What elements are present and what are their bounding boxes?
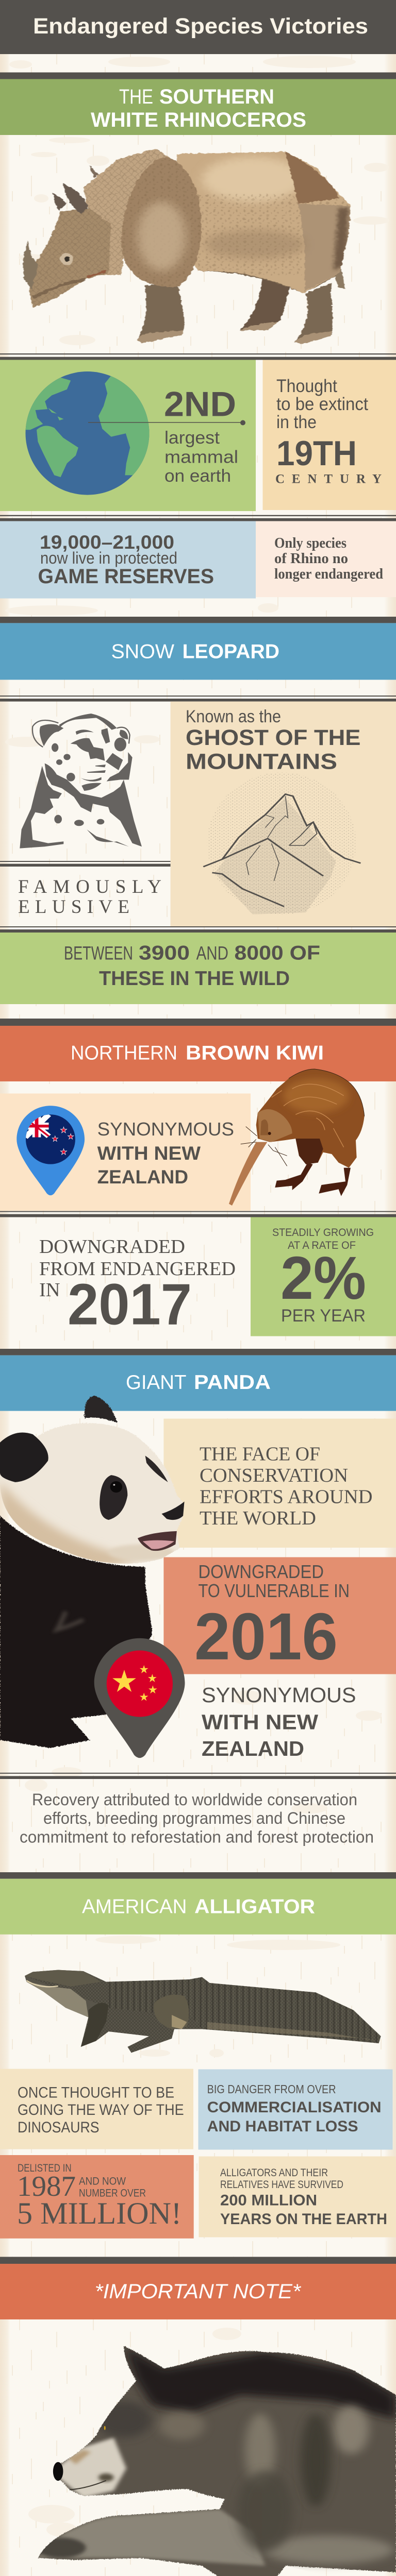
panel: synonymous with new zealand: [0, 1093, 251, 1211]
panel: leopard population: [0, 933, 396, 1004]
text: famously elusive: ELUSIVE: [18, 896, 129, 918]
panel: thought extinct: [263, 360, 396, 510]
panel: leopard population: AND: [196, 943, 228, 964]
panel: way of the dinosaurs: [0, 2069, 193, 2149]
panel: growth rate: STEADILY GROWING: [272, 1227, 374, 1239]
divider: rhino facts middle: [0, 515, 396, 521]
panel: delisted 1987: 1987: [17, 2171, 76, 2202]
panel: synonymous with new zealand: ZEALAND: [97, 1166, 188, 1188]
panel: ghost of the mountains: GHOST OF THE: [186, 725, 361, 750]
panel: synonymous with new zealand: SYNONYMOUS: [97, 1118, 234, 1140]
illustration: wolf: [36, 2346, 396, 2576]
heading: the southern white rhinoceros: WHITE RHINOCEROS: [91, 109, 306, 131]
panel: synonymous with new zealand: WITH NEW: [97, 1143, 201, 1164]
panel: thought extinct: CENTURY: [275, 472, 382, 486]
heading: american alligator: [82, 1896, 315, 1918]
pointer line: [88, 420, 245, 426]
text: famously elusive: FAMOUSLY: [18, 876, 161, 897]
panel: downgraded to vulnerable: TO VULNERABLE IN: [198, 1580, 350, 1601]
text: downgraded from endangered in 2017: FROM ENDANGERED: [39, 1258, 236, 1280]
text: downgraded from endangered in 2017: DOWNGRADED: [39, 1236, 185, 1258]
heading: giant panda: [126, 1371, 271, 1394]
panel: 200 million years: 200 MILLION: [220, 2192, 317, 2209]
text: synonymous with new zealand (panda): WITH NEW: [202, 1710, 318, 1734]
divider: leopard top: [0, 696, 396, 702]
section band: alligator: [0, 1872, 396, 1935]
panel: way of the dinosaurs: ONCE THOUGHT TO BE: [18, 2084, 174, 2102]
text: synonymous with new zealand (panda): SYNONYMOUS: [202, 1683, 356, 1707]
heading: snow leopard: LEOPARD: [183, 640, 279, 663]
panel: game reserves: now live in protected: [40, 549, 177, 567]
text: recovery attributed: Recovery attributed to worldwide conservation: [32, 1790, 357, 1809]
text: recovery attributed: commitment to reforestation and forest protection: [20, 1828, 374, 1846]
heading: northern brown kiwi: BROWN KIWI: [186, 1042, 324, 1064]
divider: kiwi middle: [0, 1211, 396, 1217]
panel: leopard population: 8000 OF: [234, 942, 320, 964]
heading: important note: *IMPORTANT NOTE*: [95, 2280, 301, 2303]
panel: big danger: COMMERCIALISATION: [207, 2099, 382, 2116]
divider: leopard bottom: [0, 926, 396, 933]
panel: way of the dinosaurs: DINOSAURS: [18, 2119, 99, 2136]
panel: ghost of the mountains: Known as the: [186, 707, 281, 726]
divider: rhino facts top: [0, 353, 396, 360]
text: downgraded from endangered in 2017: IN: [39, 1279, 60, 1301]
panel: big danger: AND HABITAT LOSS: [207, 2118, 358, 2135]
title: Endangered Species Victories: [33, 14, 368, 39]
heading: northern brown kiwi: [71, 1042, 324, 1064]
panel: game reserves: GAME RESERVES: [38, 565, 214, 588]
section band: rhinoceros: [0, 72, 396, 135]
panel: leopard population: THESE IN THE WILD: [99, 968, 290, 990]
panel: thought extinct: Thought: [276, 376, 337, 396]
panel: thought extinct: in the: [276, 412, 317, 432]
header bar: [0, 0, 396, 54]
heading: snow leopard: [111, 640, 279, 663]
panel: game reserves: 19,000–21,000: [40, 532, 174, 553]
section band: panda: [0, 1349, 396, 1411]
panel: ghost of the mountains: MOUNTAINS: [186, 749, 337, 774]
panel: downgraded to vulnerable: 2016: [194, 1600, 338, 1674]
panel: game reserves: [0, 521, 256, 599]
stat: 2nd largest mammal on earth: largest: [164, 428, 220, 448]
panel: leopard population: BETWEEN: [64, 943, 133, 964]
panel: 200 million years: RELATIVES HAVE SURVIVED: [220, 2179, 343, 2191]
section band: snow leopard: [0, 617, 396, 680]
heading: giant panda: GIANT: [126, 1371, 187, 1394]
divider: famously elusive: [0, 861, 171, 867]
illustration: kiwi: [229, 1069, 365, 1206]
panel: second largest mammal: [0, 360, 256, 511]
stat: 2nd largest mammal on earth: mammal: [164, 447, 238, 467]
text: downgraded from endangered in 2017: 2017: [68, 1272, 192, 1336]
panel: big danger: [198, 2069, 393, 2149]
panel: face of conservation: [163, 1419, 396, 1548]
icon: china pin: [94, 1638, 185, 1758]
text: synonymous with new zealand (panda): ZEALAND: [202, 1737, 304, 1760]
panel: delisted 1987: 5 MILLION!: [17, 2196, 182, 2230]
panel: delisted 1987: [0, 2155, 194, 2239]
text: famously elusive: [18, 876, 161, 918]
panel: 200 million years: [199, 2157, 396, 2237]
stat: 2nd largest mammal on earth: 2ND: [164, 384, 236, 423]
text: recovery attributed: [20, 1790, 374, 1846]
panel: 200 million years: YEARS ON THE EARTH: [220, 2211, 387, 2228]
icon: globe: [26, 371, 150, 495]
panel: downgraded to vulnerable: DOWNGRADED: [198, 1561, 324, 1582]
panel: only species of rhino: longer endangered: [274, 566, 383, 582]
section band: important note: [0, 2257, 396, 2319]
panel: delisted 1987: AND NOW: [79, 2175, 126, 2188]
panel: growth rate: 2%: [280, 1244, 366, 1312]
panel: thought extinct: to be extinct: [276, 394, 368, 414]
panel: downgraded to vulnerable: [163, 1557, 396, 1674]
panel: only species of rhino: Only species: [274, 535, 346, 551]
illustration: rhinoceros: [23, 149, 354, 344]
heading: the southern white rhinoceros: THE: [119, 86, 153, 108]
panel: only species of rhino: [256, 521, 396, 597]
illustration: mountains: [203, 772, 360, 914]
text: downgraded from endangered in 2017: [39, 1236, 236, 1336]
heading: the southern white rhinoceros: SOUTHERN: [159, 86, 274, 108]
panel: face of conservation: CONSERVATION: [200, 1465, 348, 1486]
panel: way of the dinosaurs: GOING THE WAY OF THE: [18, 2102, 184, 2119]
section band: kiwi: [0, 1019, 396, 1081]
panel: growth rate: PER YEAR: [281, 1306, 366, 1326]
heading: american alligator: AMERICAN: [82, 1896, 187, 1918]
panel: face of conservation: THE WORLD: [200, 1507, 316, 1529]
heading: the southern white rhinoceros: [91, 86, 306, 131]
panel: growth rate: AT A RATE OF: [288, 1240, 356, 1251]
divider: panda bottom: [0, 1773, 396, 1779]
panel: 200 million years: ALLIGATORS AND THEIR: [220, 2167, 328, 2179]
heading: american alligator: ALLIGATOR: [194, 1896, 315, 1918]
panel: only species of rhino: of Rhino no: [274, 550, 348, 567]
panel: big danger: BIG DANGER FROM OVER: [207, 2082, 336, 2096]
panel: delisted 1987: DELISTED IN: [18, 2162, 72, 2174]
panel: thought extinct: 19TH: [276, 434, 357, 473]
stat: 2nd largest mammal on earth: on earth: [164, 466, 231, 486]
illustration: alligator: [25, 1970, 381, 2053]
panel: leopard population: 3900: [139, 942, 190, 964]
icon: new zealand pin: [16, 1106, 85, 1195]
heading: snow leopard: SNOW: [111, 640, 174, 663]
panel: face of conservation: EFFORTS AROUND: [200, 1486, 372, 1508]
panel: delisted 1987: NUMBER OVER: [79, 2188, 146, 2199]
illustration: snow leopard: [20, 714, 142, 849]
text: recovery attributed: efforts, breeding programmes and Chinese: [43, 1809, 345, 1827]
illustration: panda: [0, 1396, 185, 1748]
panel: face of conservation: THE FACE OF: [200, 1444, 320, 1465]
panel: ghost of the mountains: [171, 702, 396, 926]
heading: giant panda: PANDA: [194, 1371, 271, 1394]
text: synonymous with new zealand (panda): [202, 1683, 356, 1760]
stat: 2nd largest mammal on earth: [164, 384, 238, 486]
panel: growth rate: [251, 1217, 396, 1336]
heading: northern brown kiwi: NORTHERN: [71, 1042, 177, 1064]
